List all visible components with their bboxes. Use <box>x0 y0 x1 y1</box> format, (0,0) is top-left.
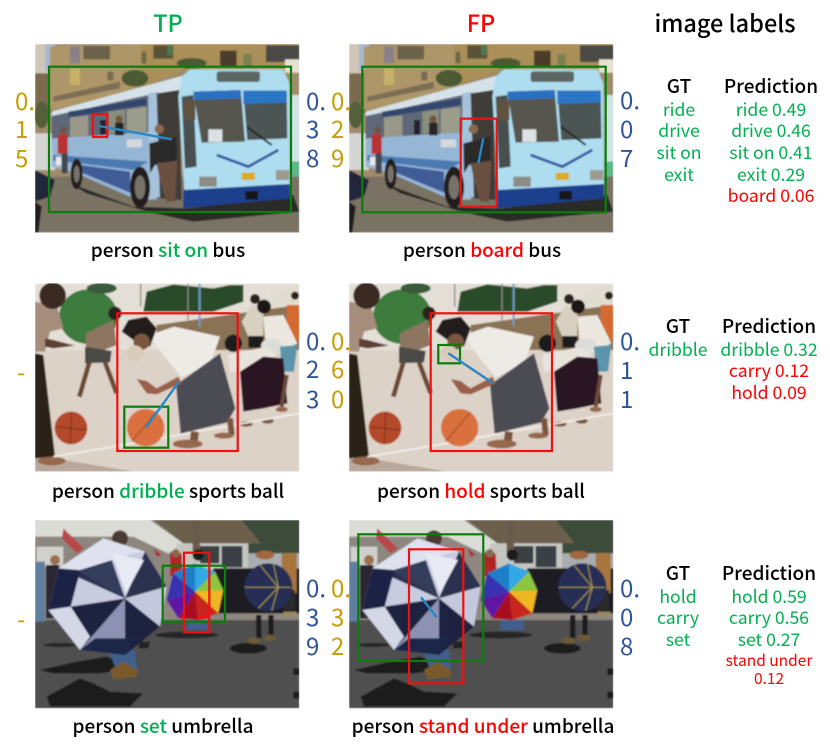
predictions with scores: Prediction <box>724 72 818 99</box>
red person box <box>117 313 238 451</box>
predictions with scores: sit on 0.41 <box>729 140 813 165</box>
predictions with scores <box>722 559 816 689</box>
score: 0.11: 1 <box>620 351 633 386</box>
ground truth labels: GT <box>666 559 691 586</box>
panel: sports ball row <box>17 282 818 504</box>
ground truth labels: drive <box>658 118 700 143</box>
predictions with scores: drive 0.46 <box>731 118 811 143</box>
score: 0.15: 1 <box>15 110 28 145</box>
caption: person set umbrella: person set umbrella <box>72 712 254 739</box>
score: 0.39 <box>306 569 326 662</box>
score: 0.15: 5 <box>15 139 28 174</box>
green umbrella box <box>358 534 483 661</box>
red person box at door <box>461 119 497 207</box>
ground truth labels: exit <box>664 162 694 187</box>
green ball box <box>124 407 168 448</box>
score: 0.32 <box>331 569 351 662</box>
score: 0.08: 0 <box>620 598 633 633</box>
predictions with scores <box>724 72 818 208</box>
red person box at window <box>93 114 107 137</box>
score: 0.11: 0. <box>620 322 640 357</box>
predictions with scores: ride 0.49 <box>736 97 806 122</box>
score: 0.23: 0. <box>306 322 326 357</box>
ground truth labels: dribble <box>648 337 708 362</box>
score: 0.38 <box>306 82 326 174</box>
green object box on bus <box>362 67 606 212</box>
photo: basketball false positive <box>349 282 613 472</box>
column heading: TP: TP <box>153 5 183 39</box>
predictions with scores: set 0.27 <box>738 627 800 652</box>
score: 0.15 <box>15 82 35 174</box>
score: 0.60: 6 <box>331 350 344 385</box>
score: 0.60: 0 <box>331 380 344 415</box>
caption: person hold sports ball: person hold sports ball <box>377 477 585 504</box>
score: 0.29: 9 <box>331 139 344 174</box>
caption: person board bus: person board bus <box>403 236 561 263</box>
predictions with scores: carry 0.12 <box>729 358 809 383</box>
dash score: - <box>17 353 25 388</box>
ground truth labels: GT <box>667 72 692 99</box>
interaction line <box>197 617 208 618</box>
score: 0.07: 0 <box>620 110 633 145</box>
ground truth labels: hold <box>659 584 697 609</box>
score: 0.60 <box>331 322 351 415</box>
column heading: FP: FP <box>467 5 495 39</box>
score: 0.23 <box>306 322 326 415</box>
photo: umbrella true positive <box>35 520 299 708</box>
ground truth labels: GT <box>666 312 691 339</box>
score: 0.39: 9 <box>306 627 319 662</box>
predictions with scores: carry 0.56 <box>729 605 809 630</box>
blue interaction line <box>421 597 437 617</box>
ground truth labels <box>657 559 699 652</box>
photo: bus true positive <box>34 44 299 233</box>
ground truth labels <box>656 72 702 187</box>
predictions with scores: exit 0.29 <box>737 162 805 187</box>
predictions with scores: hold 0.09 <box>731 380 807 405</box>
predictions with scores: Prediction <box>722 312 816 339</box>
score: 0.07: 7 <box>620 139 633 174</box>
caption: person dribble sports ball: person dribble sports ball <box>52 477 284 504</box>
ground truth labels <box>648 312 708 362</box>
predictions with scores: Prediction <box>722 559 816 586</box>
photo: umbrella false positive <box>349 520 613 708</box>
score: 0.29 <box>331 82 351 174</box>
score: 0.39: 0. <box>306 569 326 604</box>
score: 0.07: 0. <box>620 81 640 116</box>
green small ball box <box>438 345 460 363</box>
dash score: - <box>17 600 25 635</box>
red person box <box>184 553 209 632</box>
score: 0.15: 0. <box>15 82 35 117</box>
score: 0.60: 0. <box>331 322 351 357</box>
predictions with scores: 0.12 <box>754 667 784 689</box>
score: 0.07 <box>620 81 640 174</box>
score: 0.38: 0. <box>306 82 326 117</box>
score: 0.32: 0. <box>331 569 351 604</box>
score: 0.38: 3 <box>306 110 319 145</box>
caption: person stand under umbrella: person stand under umbrella <box>352 712 614 739</box>
score: 0.29: 0. <box>331 82 351 117</box>
panel: umbrella row <box>17 520 816 739</box>
score: 0.38: 8 <box>306 139 319 174</box>
blue interaction line <box>99 126 172 139</box>
score: 0.39: 3 <box>306 598 319 633</box>
blue interaction line <box>448 353 493 383</box>
score: 0.23: 2 <box>306 350 319 385</box>
panel: bus row <box>15 44 818 263</box>
column heading: image labels: image labels <box>654 5 796 39</box>
predictions with scores: stand under <box>726 649 813 671</box>
blue interaction line <box>478 138 483 163</box>
ground truth labels: carry <box>657 605 699 630</box>
score: 0.11: 1 <box>620 380 633 415</box>
photo: bus false positive <box>348 44 613 233</box>
predictions with scores: dribble 0.32 <box>720 337 818 362</box>
score: 0.08: 0. <box>620 569 640 604</box>
red person box <box>431 313 552 451</box>
predictions with scores <box>720 312 818 405</box>
blue interaction line <box>146 382 179 428</box>
score: 0.32: 3 <box>331 598 344 633</box>
score: 0.11 <box>620 322 640 415</box>
ground truth labels: sit on <box>656 140 702 165</box>
predictions with scores: hold 0.59 <box>731 584 807 609</box>
predictions with scores: board 0.06 <box>728 183 814 208</box>
caption: person sit on bus: person sit on bus <box>91 236 245 263</box>
score: 0.29: 2 <box>331 110 344 145</box>
score: 0.23: 3 <box>306 380 319 415</box>
score: 0.32: 2 <box>331 627 344 662</box>
green object box on bus <box>49 67 291 212</box>
score: 0.08: 8 <box>620 627 633 662</box>
ground truth labels: set <box>666 627 691 652</box>
score: 0.08 <box>620 569 640 662</box>
green umbrella box <box>163 566 225 622</box>
photo: basketball true positive <box>35 282 299 472</box>
red person box <box>409 549 463 683</box>
ground truth labels: ride <box>663 97 695 122</box>
